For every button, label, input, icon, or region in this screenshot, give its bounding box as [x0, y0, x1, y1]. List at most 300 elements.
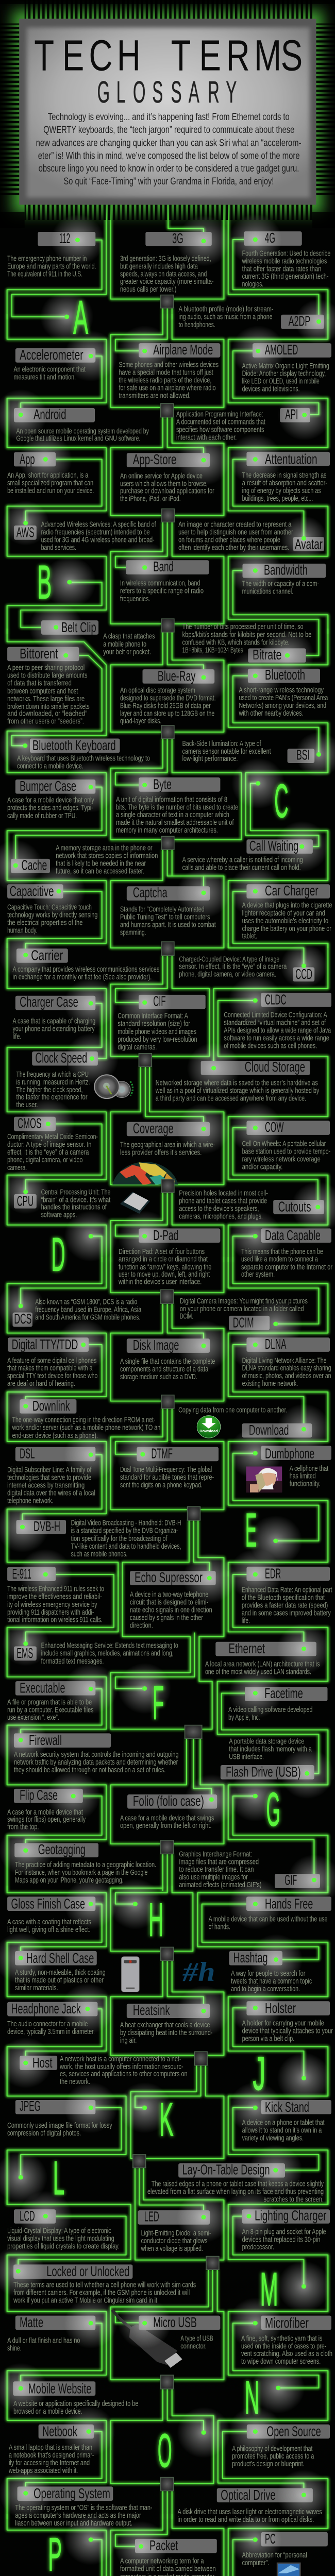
term: Bluetooth Keyboard: A keyboard that uses Bluetooth wireless technology to: [17, 754, 150, 763]
term: Bumper Case: protects the sides and edges. Typi-: [7, 804, 93, 812]
term: Captcha: spamming.: [120, 928, 146, 937]
term: Digital TTY/TDD: special TTY text device for those who: [7, 1371, 97, 1380]
image: micro USB cable: [112, 2310, 182, 2368]
term: CMOS: Complimentary Metal Oxide Semicon-: [7, 1132, 98, 1141]
term: Clock Speed: [16, 1033, 119, 1109]
term: Accelerometer: measures tilt and motion.: [14, 373, 76, 381]
term: Cache: network that stores copies of information: [56, 852, 158, 860]
term: Hashtag: Hashtag: [233, 1950, 267, 1966]
term: CCD: sensor. In effect, it is the “eye” of a camera: [179, 962, 287, 971]
term: Airplane Mode: the wireless radio parts of the device,: [119, 376, 211, 384]
term: Band: frequencies.: [120, 595, 150, 603]
term: Download: Download: [249, 1422, 289, 1438]
term: Digital TTY/TDD: are deaf or hard of hearing.: [7, 1379, 75, 1388]
term: Band: Band: [153, 559, 174, 575]
term: A2DP: A bluetooth profile (mode) for stream-: [179, 305, 274, 313]
term: DCS: and South America for GSM mobile phones.: [35, 1313, 140, 1321]
chips: [161, 725, 174, 850]
term: Blue-Ray: Blue-Ray disks hold 25GB of data per: [120, 702, 211, 710]
term: Bittorent: A peer to peer sharing protocol: [7, 664, 85, 672]
term: App-Store: purchase or download applications for: [120, 487, 214, 496]
term: Hard Shell Case: [0, 1933, 106, 1992]
term: Downlink: Downlink: [32, 1398, 70, 1414]
letter: J: [253, 2047, 330, 2104]
term: 112: The equivalent of 911 in the U.S.: [7, 270, 82, 279]
term: CMOS: camera.: [7, 1163, 27, 1172]
term: CPU: CPU: [17, 1193, 34, 1209]
term: Clock Speed: is running, measured in Hertz.: [16, 1078, 90, 1087]
term: Hashtag: [229, 1934, 312, 1993]
term: Blue-Ray: layer and can store up to 128GB on the: [120, 709, 214, 718]
term: Ethernet: [205, 1623, 330, 1676]
term: Coverage: Coverage: [133, 1121, 174, 1137]
term: CPU: Central Processing Unit: The: [41, 1188, 110, 1196]
term: Blue-Ray: An optical disc storage system: [120, 686, 195, 695]
term: E-911: E-911: [12, 1566, 31, 1582]
term: JPEG: Commonly used image file format for lossy: [7, 2121, 112, 2130]
term: CMOS: CMOS: [18, 1115, 41, 1131]
term: Belt Clip: a mobile phone to: [103, 640, 146, 649]
term: Locked or Unlocked: [0, 2246, 196, 2305]
term: Attentuation: [229, 434, 330, 503]
term: LCD: [7, 2191, 120, 2250]
term: Hashtag: and to begin a conversation.: [231, 1985, 300, 1993]
term: CIF: standard resolution (size) for: [118, 1020, 190, 1028]
term: Call Waiting: [182, 821, 329, 872]
image: desktop PC: [276, 2563, 306, 2576]
term: GIF: animated effects (animated GIF’s): [179, 1880, 261, 1889]
term: Hashtag: A way for people to search for: [231, 1969, 305, 1978]
term: Cache: A memory storage area in the phone or: [56, 844, 153, 853]
term: D-Pad: arranged in a circle or diamond that: [119, 1255, 208, 1263]
letter: H: [109, 1878, 163, 1947]
term: Folio (folio case): Folio (folio case): [133, 1793, 204, 1809]
term: JPEG: [7, 2082, 118, 2138]
term: A2DP: [179, 299, 335, 344]
term: Android: [0, 389, 149, 443]
term: Lighting Charger: predecessor.: [242, 2243, 274, 2251]
term: Hands Free: of hands.: [209, 1923, 230, 1931]
term: DSL: [7, 1429, 118, 1505]
letter: B: B: [38, 556, 52, 609]
term: 3G: speeds, always on data access, and: [120, 270, 207, 279]
term: Band: In wireless communication, band: [120, 579, 200, 588]
term: Bluetooth Keyboard: connect to a mobile device.: [17, 762, 83, 771]
term: Flash Drive (USB): A portable data storage device: [229, 1737, 304, 1745]
section: Gloss Finish Case to Lay-On-Table Design: [0, 1878, 333, 2205]
term: Heatsink: by dissipating heat into the surround-: [120, 2028, 212, 2037]
term: DVB-H: Digital Video Broadcasting - Handheld: DVB-H: [71, 1519, 181, 1527]
letter: N: [245, 2363, 305, 2425]
term: CMOS: ductor: A type of image sensor. In: [7, 1140, 91, 1149]
term: Downlink: end-user device (such as a phone).: [12, 1431, 98, 1440]
term: API: [176, 389, 331, 442]
term: DCS: Also known as “GSM 1800”, DCS is a radio: [35, 1298, 137, 1306]
term: Byte: a single character of text in a computer which: [116, 810, 229, 819]
term: PC: computer”.: [242, 2558, 269, 2567]
letter: O: O: [158, 2425, 172, 2477]
term: Capacitive: human body.: [7, 926, 38, 935]
term: LED: when a voltage is applied.: [141, 2244, 203, 2253]
term: Host: [0, 2038, 188, 2088]
term: Android: Google that utilizes Linux kernel and GNU software.: [16, 434, 140, 443]
icon: speed gauges: [94, 1075, 133, 1098]
term: Captcha: Public Tuning Test” to tell computers: [120, 913, 210, 921]
chips: [161, 1725, 202, 1854]
term: Holster: [229, 1982, 333, 2043]
term: Hard Shell Case: Hard Shell Case: [26, 1951, 94, 1967]
letter: D: [51, 1211, 118, 1281]
term: Byte: Byte: [153, 776, 172, 792]
term: Cache: [0, 840, 158, 891]
term: Geotagging: Geotagging: [38, 1842, 86, 1858]
term: DSL: DSL: [20, 1446, 35, 1462]
term: CCD: CCD: [295, 967, 312, 982]
term: Bittorent: used to distribute large amounts: [7, 671, 88, 680]
term: CMOS: phone, digital camera, or video: [7, 1156, 82, 1164]
term: GIF: Image files that are compressed: [179, 1858, 259, 1867]
term: BSI: low-light performance.: [182, 754, 238, 763]
term: Echo Supressor: caused by signals in the other: [130, 1614, 203, 1622]
term: COW: [229, 1103, 330, 1172]
term: Netbook: ily for accessing the Internet and: [9, 2459, 90, 2467]
letter: P: [48, 2514, 118, 2576]
term: Heatsink: ing air.: [120, 2036, 137, 2045]
term: Bandwidth: Bandwidth: [264, 562, 308, 578]
intro text: [36, 112, 301, 187]
term: Mobile Website: A website or application specifically designed to be: [13, 2399, 138, 2408]
term: Echo Supressor: Echo Supressor: [135, 1570, 203, 1586]
term: Flip Case: A case for a mobile device that: [7, 1808, 83, 1817]
term: JPEG: JPEG: [20, 2098, 41, 2114]
term: Bittorent: Bittorent: [20, 646, 58, 662]
section: Gloss Finish Case to Lay-On-Table Design: L: [53, 2152, 64, 2205]
term: D-Pad: Direction Pad: A set of four buttons: [119, 1247, 205, 1256]
term: Firewall: A network security system that controls the incoming and outgoing: [14, 1750, 179, 1759]
term: Bumper Case: cally made of rubber or TPU.: [7, 811, 77, 820]
term: Firewall: they should be allowed through or not based on a set of rules.: [14, 1766, 165, 1774]
letter: J: J: [253, 2047, 265, 2100]
term: Carrier: Carrier: [31, 947, 63, 963]
term: Bittorent: and downloaded, or “leached”: [7, 709, 87, 718]
term: Downlink: work and/or server (such as a mobile phone network) TO an: [12, 1423, 160, 1432]
term: E-911: The wireless Enhanced 911 rules seek to: [7, 1585, 104, 1593]
term: Locked or Unlocked: work if you put an active T Mobile or Cingular sim card in it.: [13, 2296, 159, 2305]
term: Netbook: A small laptop that is smaller than: [9, 2443, 92, 2452]
term: EDR: EDR: [265, 1566, 281, 1582]
term: Netbook: Netbook: [42, 2424, 78, 2439]
term: Digital TTY/TDD: A feature of some digital cell phones: [7, 1357, 96, 1365]
term: EMS: EMS: [16, 1646, 33, 1662]
term: GIF: Graphics Interchange Format:: [179, 1850, 252, 1859]
section: LCD to Optical Drive: [0, 2191, 332, 2528]
term: Bitrate: confused with KB, which stands for kilobyte.: [182, 638, 290, 647]
term: D-Pad: D-Pad: [153, 1228, 178, 1244]
term: Byte: made it the natural smallest addressable unit of: [116, 818, 234, 827]
term: Kick Stand: [229, 2082, 331, 2143]
term: Host: A network host is a computer connected to a net-: [60, 2055, 181, 2063]
term: Packet: Packet: [149, 2538, 178, 2554]
term: EMS: Enhanced Messaging Service: Extends text messaging to: [41, 1641, 178, 1650]
term: D-Pad: [118, 1211, 220, 1286]
term: Car Charger: [229, 866, 332, 940]
term: Avatar: An image or character created to represent a: [178, 520, 292, 529]
term: AWS: used for 3G and 4G wireless phone and broad-: [41, 536, 155, 544]
term: Host: es, services and applications to other computers on: [60, 2070, 188, 2078]
term: Capacitive: technology works by directly sensing: [7, 911, 97, 919]
term: Operating System: Operating System: [34, 2486, 110, 2502]
section: title and terms 112 to A: [0, 0, 335, 344]
image: man with brick phone: [246, 1466, 282, 1493]
term: Captcha: Stands for “Completely Automated: [120, 905, 205, 913]
term: Operating System: ages a computer’s hardware and acts as the major: [15, 2511, 141, 2520]
term: Firewall: network traffic by analyzing data packets and determining whether: [14, 1758, 178, 1767]
term: Belt Clip: your belt or pocket.: [103, 648, 151, 656]
term: Cutouts: [179, 1181, 335, 1232]
term: Accelerometer: An electronic component that: [14, 365, 86, 374]
term: Clock Speed: Clock Speed: [35, 1050, 87, 1066]
term: COW: and/or capacity.: [242, 1163, 282, 1172]
term: GIF: to reduce transfer time. It can: [179, 1865, 254, 1874]
term: Lay-On-Table Design: [147, 2145, 324, 2204]
header chip pins and glow: [0, 0, 335, 228]
icon: globe: [112, 1162, 178, 1185]
term: Capacitive: Capacitive: [10, 883, 54, 900]
term: Locked or Unlocked: These terms are used to tell whether a cell phone will work with sim cards: [13, 2281, 196, 2290]
term: Mobile Website: [0, 2363, 138, 2416]
term: DLNA: existing home network.: [242, 1379, 298, 1388]
term: Matte: shine.: [7, 2344, 21, 2353]
term: Kick Stand: Kick Stand: [265, 2099, 309, 2115]
term: AWS: radio frequencies (spectrum) intended to be: [41, 528, 150, 536]
term: Bittorent: between computers and host: [7, 687, 78, 696]
letter: F: F: [153, 1677, 164, 1730]
term: CIF: Common Interface Format: A: [118, 1012, 188, 1020]
section: DCIM to DVB-H: [0, 1283, 331, 1566]
term: Heatsink: A heat exchanger that cools a device: [120, 2021, 210, 2029]
chips: [133, 1947, 207, 2168]
chips: [161, 2257, 219, 2491]
term: Bitrate: 1B=8bits, 1KB=1024 Bytes: [182, 646, 243, 655]
term: DVB-H: tion specifically for the broadcasting of: [71, 1534, 167, 1543]
term: E-911: tional information on wireless 911 calls.: [7, 1616, 103, 1624]
term: Coverage: [120, 1104, 230, 1157]
term: LED: Light-Emitting Diode: a semi-: [141, 2229, 211, 2238]
term: Digital TTY/TDD: that makes them compatible with a: [7, 1364, 93, 1372]
term: Band: refers to a specific range of radio: [120, 587, 204, 596]
term: Cloud Storage: [155, 1043, 320, 1103]
term: DVB-H: DVB-H: [34, 1519, 60, 1535]
term: BSI: Back-Side Illumination: A type of: [182, 739, 261, 748]
icon: download button: Download: [199, 1429, 218, 1433]
term: LED: [138, 2192, 230, 2253]
term: Folio (folio case): A case for a mobile device that swings: [120, 1814, 214, 1823]
term: Folio (folio case): [120, 1774, 238, 1830]
letter: D: D: [51, 1229, 65, 1281]
term: DSL: internet access by transmitting: [7, 1481, 85, 1490]
term: Airplane Mode: for safe use on an airplane where radio: [119, 384, 216, 392]
term: JPEG: compression of digital photos.: [7, 2129, 81, 2138]
term: Airplane Mode: Some phones and other wireless devices: [119, 361, 219, 369]
letter: M: M: [260, 2263, 278, 2316]
term: 112: [7, 214, 104, 279]
term: Heatsink: [120, 1986, 230, 2045]
term: Bumper Case: [7, 761, 118, 820]
term: 112: 112: [59, 230, 70, 247]
chip: [161, 295, 174, 308]
term: Capacitive: [7, 866, 97, 935]
term: Matte: A dull or flat finish and has no: [7, 2336, 80, 2345]
term: Hard Shell Case: similar materials.: [15, 1984, 58, 1992]
term: Download: Copying data from one computer to another.: [178, 1406, 288, 1415]
section: Gloss Finish Case to Lay-On-Table Design: K: [159, 2094, 174, 2146]
term: Flash Drive (USB): USB interface.: [229, 1753, 264, 1761]
term: Bluetooth: Bluetooth: [265, 667, 305, 683]
term: 3G: but generally includes high data: [120, 262, 198, 270]
term: EMS: [2, 1621, 178, 1666]
term: Capacitive: Capacitive Touch: Capacitive touch: [7, 903, 92, 911]
term: 112: Europe and many parts of the world.: [7, 262, 96, 270]
term: Bittorent: broken down into smaller packets: [7, 702, 90, 711]
term: Echo Supressor: A device in a two-way telephone: [130, 1590, 208, 1599]
term: LCD: visual display that uses the light modulating: [7, 2234, 114, 2243]
term: PC: Abbreviation for “personal: [242, 2551, 307, 2560]
term: Dumbphone: has limited: [290, 1472, 316, 1480]
term: Captcha: and humans apart. It is used to combat: [120, 921, 216, 929]
term: Geotagging: [0, 1825, 156, 1885]
term: Car Charger: tablet.: [242, 932, 257, 940]
term: Blue-Ray: [120, 652, 230, 725]
term: DCS: DCS: [14, 1311, 31, 1327]
term: Locked or Unlocked: from different carriers. For example, if the GSM phone is unlocked it will: [13, 2289, 190, 2297]
term: DLNA: [229, 1319, 331, 1388]
term: Charger Case: your phone and extending battery: [12, 1025, 95, 1033]
term: Microfiber: [229, 2298, 332, 2366]
term: CLDC: CLDC: [265, 992, 286, 1008]
letter: E: E: [245, 1504, 257, 1557]
term: DSL: technologies that serve to provide: [7, 1473, 91, 1482]
term: D-Pad: function as “arrow” keys, allowing the: [119, 1263, 211, 1272]
term: Headphone Jack: The audio connector for a mobile: [7, 2020, 88, 2028]
term: Coverage: The geographical area in which a wire-: [120, 1141, 215, 1149]
term: Blue-Ray: quad-layer disks.: [120, 717, 161, 725]
term: Download: [178, 1404, 330, 1455]
term: Packet: [114, 2521, 217, 2576]
term: Dumbphone: [229, 1428, 331, 1488]
term: BSI: BSI: [296, 747, 310, 764]
term: App: [7, 434, 94, 495]
term: Bittorent: [7, 630, 92, 726]
term: DCIM: DCIM.: [180, 1312, 193, 1320]
term: Charger Case: Charger Case: [20, 994, 78, 1010]
term: Bitrate: [182, 623, 314, 681]
term: Cutouts: Precision holes located in most cell-: [179, 1189, 268, 1197]
section: Gloss Finish Case to Lay-On-Table Design: H: [148, 1894, 163, 1947]
term: Host: work, the host usually offers information resourc-: [59, 2062, 183, 2071]
term: AWS: [2, 501, 156, 552]
term: GIF: GIF: [284, 1872, 297, 1888]
term: App: App: [20, 451, 35, 467]
chips: [139, 942, 174, 1192]
term: CPU: handles the instructions of: [41, 1203, 107, 1212]
term: CPU: software apps.: [41, 1211, 77, 1219]
term: DLNA: DLNA: [265, 1336, 287, 1352]
term: Hands Free: [209, 1878, 331, 1931]
term: AMOLED: AMOLED: [265, 342, 298, 358]
term: DTMF: [116, 1429, 219, 1489]
term: Cutouts: phone and tablet cases that provide: [179, 1197, 267, 1205]
letter: K: [118, 2082, 174, 2146]
term: LED: LED: [144, 2209, 159, 2225]
term: Headphone Jack: [7, 1984, 114, 2036]
term: Operating System: The operating system or “OS” is the software that man-: [15, 2503, 153, 2512]
section: Belt Clip to Car Charger: [0, 602, 335, 940]
term: Facetime: by Apple, Inc.: [228, 1713, 260, 1722]
term: API: interact with each other.: [176, 433, 237, 442]
term: Cache: Cache: [21, 857, 47, 873]
term: Disk Image: storage medium such as a DVD.: [120, 1372, 197, 1381]
section: E-911 to GIF: [0, 1549, 335, 1905]
term: Matte: [7, 2298, 118, 2353]
term: Microfiber: Microfiber: [265, 2315, 309, 2331]
term: AWS: Advanced Wireless Services: A specific band of: [41, 520, 156, 529]
term: Byte: bits. The byte is the number of bits used to create: [116, 803, 238, 811]
term: Optical Drive: Optical Drive: [221, 2487, 276, 2503]
term: Airplane Mode: transmitters are not allowed.: [119, 392, 191, 400]
term: Executable: [7, 1664, 118, 1722]
term: Bandwidth: munications channel.: [242, 587, 293, 596]
term: DVB-H: such as mobile phones.: [71, 1550, 127, 1558]
term: DCIM: [180, 1297, 308, 1349]
term: E-911: improve the effectiveness and reliabil-: [7, 1592, 102, 1601]
term: Belt Clip: Belt Clip: [61, 619, 96, 636]
term: Carrier: [0, 929, 159, 981]
term: COW: COW: [265, 1120, 284, 1136]
term: Clock Speed: The frequency at which a CPU: [16, 1070, 89, 1079]
term: API: specifies how software components: [176, 426, 264, 434]
term: Android: Android: [34, 406, 66, 423]
letter: M: [260, 2261, 330, 2316]
term: CIF: CIF: [153, 993, 166, 1009]
term: DTMF: standard for audible tones that repre-: [120, 1473, 214, 1482]
letter: N: N: [245, 2371, 260, 2425]
title: TECH TERMS: TECH TERMS: [34, 31, 303, 79]
term: Geotagging: Maps app on your iPhone, you’re geotagging.: [15, 1876, 124, 1885]
term: AWS: band services.: [41, 544, 76, 552]
term: Optical Drive: [177, 2469, 330, 2524]
term: D-Pad: within the device’s user interface.: [118, 1278, 202, 1286]
term: GIF: also use multiple images for: [179, 1873, 248, 1882]
section: E-911 to GIF: G: [266, 1783, 280, 1836]
term: Host: Host: [32, 2055, 53, 2071]
term: Open Source: product’s design or blueprint.: [232, 2460, 305, 2468]
term: API: API: [285, 406, 298, 423]
term: Lay-On-Table Design: Lay-On-Table Design: [182, 2162, 270, 2178]
term: CCD: phone, digital camera, or video camera.: [179, 970, 276, 979]
term: Belt Clip: [29, 602, 155, 656]
term: App-Store: users which allows them to browse,: [120, 480, 208, 488]
letter: L: [0, 2152, 64, 2205]
term: Dumbphone: functionality.: [290, 1480, 321, 1488]
term: Carrier: in exchange for a monthly or flat fee (See also provider).: [12, 973, 152, 981]
term: Echo Supressor: circuit that is designed to elimi-: [130, 1598, 208, 1606]
term: App: An App, short for application, is a: [7, 471, 89, 480]
term: Avatar: often identify each other by their usernames.: [178, 544, 289, 552]
term: Packet: A computer networking term for a: [120, 2557, 204, 2566]
term: DSL: digital data over the wires of a local: [7, 1489, 95, 1498]
term: Executable: run by a computer. Executable files: [7, 1706, 94, 1715]
term: Kick Stand: variety of viewing angles.: [242, 2134, 304, 2143]
